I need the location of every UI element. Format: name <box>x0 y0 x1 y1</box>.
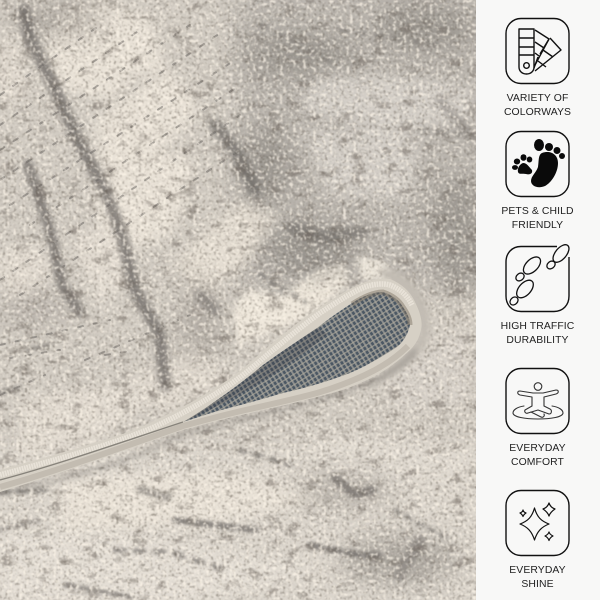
backing warm inner edge <box>352 292 410 325</box>
label: pets and child friendly: PETS & CHILD <box>501 206 574 217</box>
icon: sparkles <box>505 490 570 556</box>
backing upper shadow <box>183 328 328 422</box>
label: everyday shine: SHINE <box>521 579 554 590</box>
binding seam <box>0 422 183 480</box>
label: high traffic durability <box>501 321 574 346</box>
sidebar: feature list <box>476 0 600 600</box>
dark woven backing <box>183 292 410 422</box>
label: everyday comfort: EVERYDAY <box>509 443 566 454</box>
label: everyday comfort <box>509 443 566 468</box>
label: everyday shine <box>509 565 566 590</box>
feature: everyday comfort <box>505 368 570 468</box>
icon: meditating figure <box>505 368 570 434</box>
lower bound edge stitching <box>0 346 408 487</box>
soft grey shading areas <box>0 2 482 584</box>
label: pets and child friendly <box>501 206 574 231</box>
pile mottling and grain texture <box>0 0 477 600</box>
bright cream patch beside the fold <box>195 215 392 345</box>
label: everyday comfort: COMFORT <box>511 457 564 468</box>
label: high traffic durability: HIGH TRAFFIC <box>501 321 574 332</box>
fine dashed weave lines <box>0 25 240 395</box>
upper bound edge stitching <box>0 284 412 475</box>
label: high traffic durability: DURABILITY <box>506 335 569 346</box>
label: everyday shine: EVERYDAY <box>509 565 566 576</box>
feature: high traffic durability <box>501 244 574 346</box>
light cream patches <box>0 0 470 600</box>
icon: paw and child foot prints <box>505 130 570 198</box>
icon: footprints in a broken frame <box>505 244 570 312</box>
dark diagonal pattern streaks <box>24 10 470 385</box>
lower rug pattern strokes <box>0 25 470 597</box>
label: pets and child friendly: FRIENDLY <box>512 220 563 231</box>
label: variety of colorways: COLORWAYS <box>504 107 571 118</box>
label: variety of colorways: VARIETY OF <box>507 93 568 104</box>
feature: everyday shine <box>505 490 570 590</box>
label: variety of colorways <box>504 93 571 118</box>
feature: pets and child friendly <box>501 130 574 231</box>
icon: colour fan deck <box>505 18 570 84</box>
rug fold: bound edge and backing <box>0 279 422 492</box>
rug fold: shadow under the curl <box>0 350 416 494</box>
feature: variety of colorways <box>504 18 571 118</box>
rug fold: outer wool lip <box>362 269 430 392</box>
